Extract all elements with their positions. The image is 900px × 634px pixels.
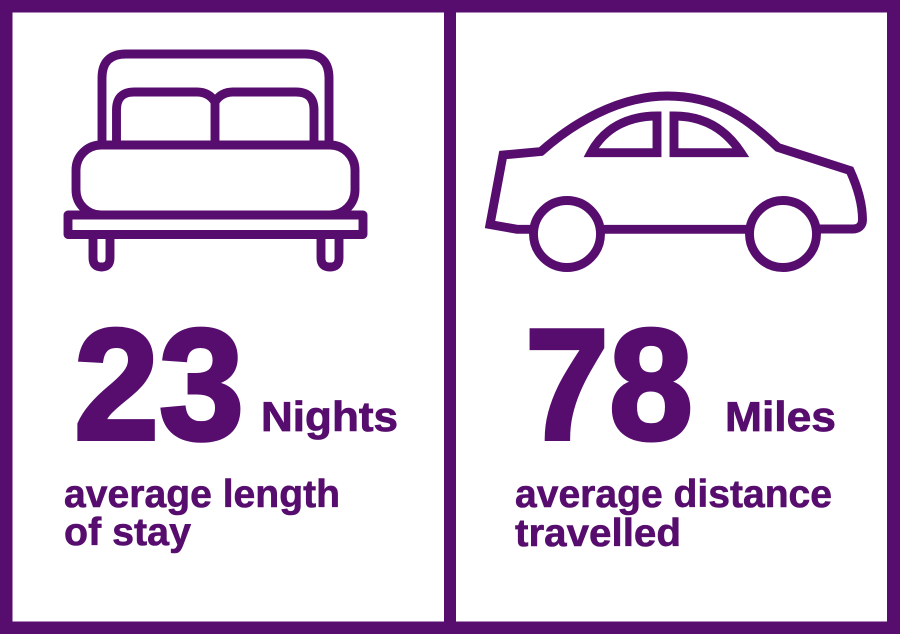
stat: 78 miles: 78 bbox=[525, 297, 693, 473]
icon: bed bbox=[68, 54, 363, 267]
icon: rear window bbox=[591, 116, 657, 153]
icon: front window bbox=[674, 116, 741, 153]
caption: average distance travelled bbox=[515, 473, 832, 555]
icon: car bbox=[490, 96, 862, 268]
caption: average distance travelled: average distance bbox=[515, 473, 832, 516]
caption: average length of stay bbox=[64, 473, 340, 554]
unit: nights: Nights bbox=[261, 393, 398, 440]
panel: length of stay bbox=[64, 54, 398, 554]
unit: miles: Miles bbox=[725, 393, 836, 440]
caption: average length of stay: average length bbox=[64, 473, 340, 516]
stat: 23 nights: 23 bbox=[74, 297, 244, 473]
caption: average distance travelled: travelled bbox=[515, 512, 681, 555]
caption: average length of stay: of stay bbox=[64, 511, 191, 554]
panel: distance travelled bbox=[490, 96, 862, 555]
